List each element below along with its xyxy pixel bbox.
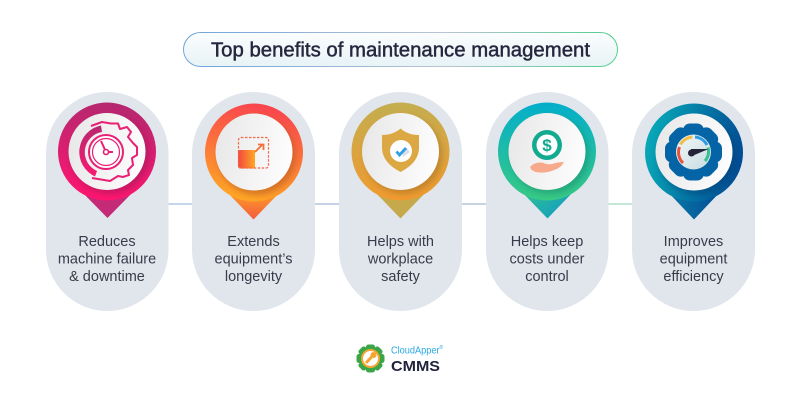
- panel: improves efficiency: [632, 92, 755, 311]
- logo: CloudApper CMMS: CMMS: [391, 358, 440, 375]
- text: caption 5: efficiency: [663, 269, 724, 285]
- text: caption 5: Improves: [664, 234, 723, 250]
- text: caption 2: equipment’s: [215, 252, 292, 268]
- text: caption 3: safety: [381, 269, 421, 285]
- title: Top benefits of maintenance management: [211, 40, 590, 62]
- text: caption 1: machine failure: [58, 252, 156, 268]
- icon: pin with coin and hand: $: [542, 136, 552, 155]
- icon: pin with gear gauge: [645, 104, 743, 220]
- panel: reduces machine failure: [46, 92, 168, 311]
- text: caption 1: Reduces: [78, 234, 136, 250]
- text: caption 4: Helps keep: [511, 234, 583, 250]
- logo: CloudApper CMMS: CloudApper: [391, 344, 440, 356]
- icon: pin with gear clock: [58, 102, 156, 218]
- panel: workplace safety: [339, 92, 462, 311]
- logo: CloudApper CMMS: [356, 344, 444, 375]
- icon: pin with coin and hand: [498, 102, 596, 218]
- title: [184, 32, 618, 66]
- icon: pin with shield: [352, 102, 450, 218]
- icon: logo gear: [356, 344, 384, 372]
- text: caption 3: workplace: [367, 252, 433, 268]
- text: caption 3: Helps with: [367, 234, 434, 250]
- text: caption 4: control: [525, 269, 569, 285]
- text: caption 1: & downtime: [69, 269, 145, 285]
- text: caption 4: costs under: [510, 252, 585, 268]
- text: caption 5: equipment: [660, 252, 727, 268]
- text: caption 2: Extends: [227, 234, 280, 250]
- logo: CloudApper CMMS: ®: [440, 344, 444, 351]
- connector line: [168, 203, 632, 205]
- icon: pin with resize square: [205, 104, 303, 220]
- panel: extends longevity: [192, 92, 315, 311]
- panel: keep costs under control: [486, 92, 608, 311]
- text: caption 2: longevity: [225, 269, 283, 285]
